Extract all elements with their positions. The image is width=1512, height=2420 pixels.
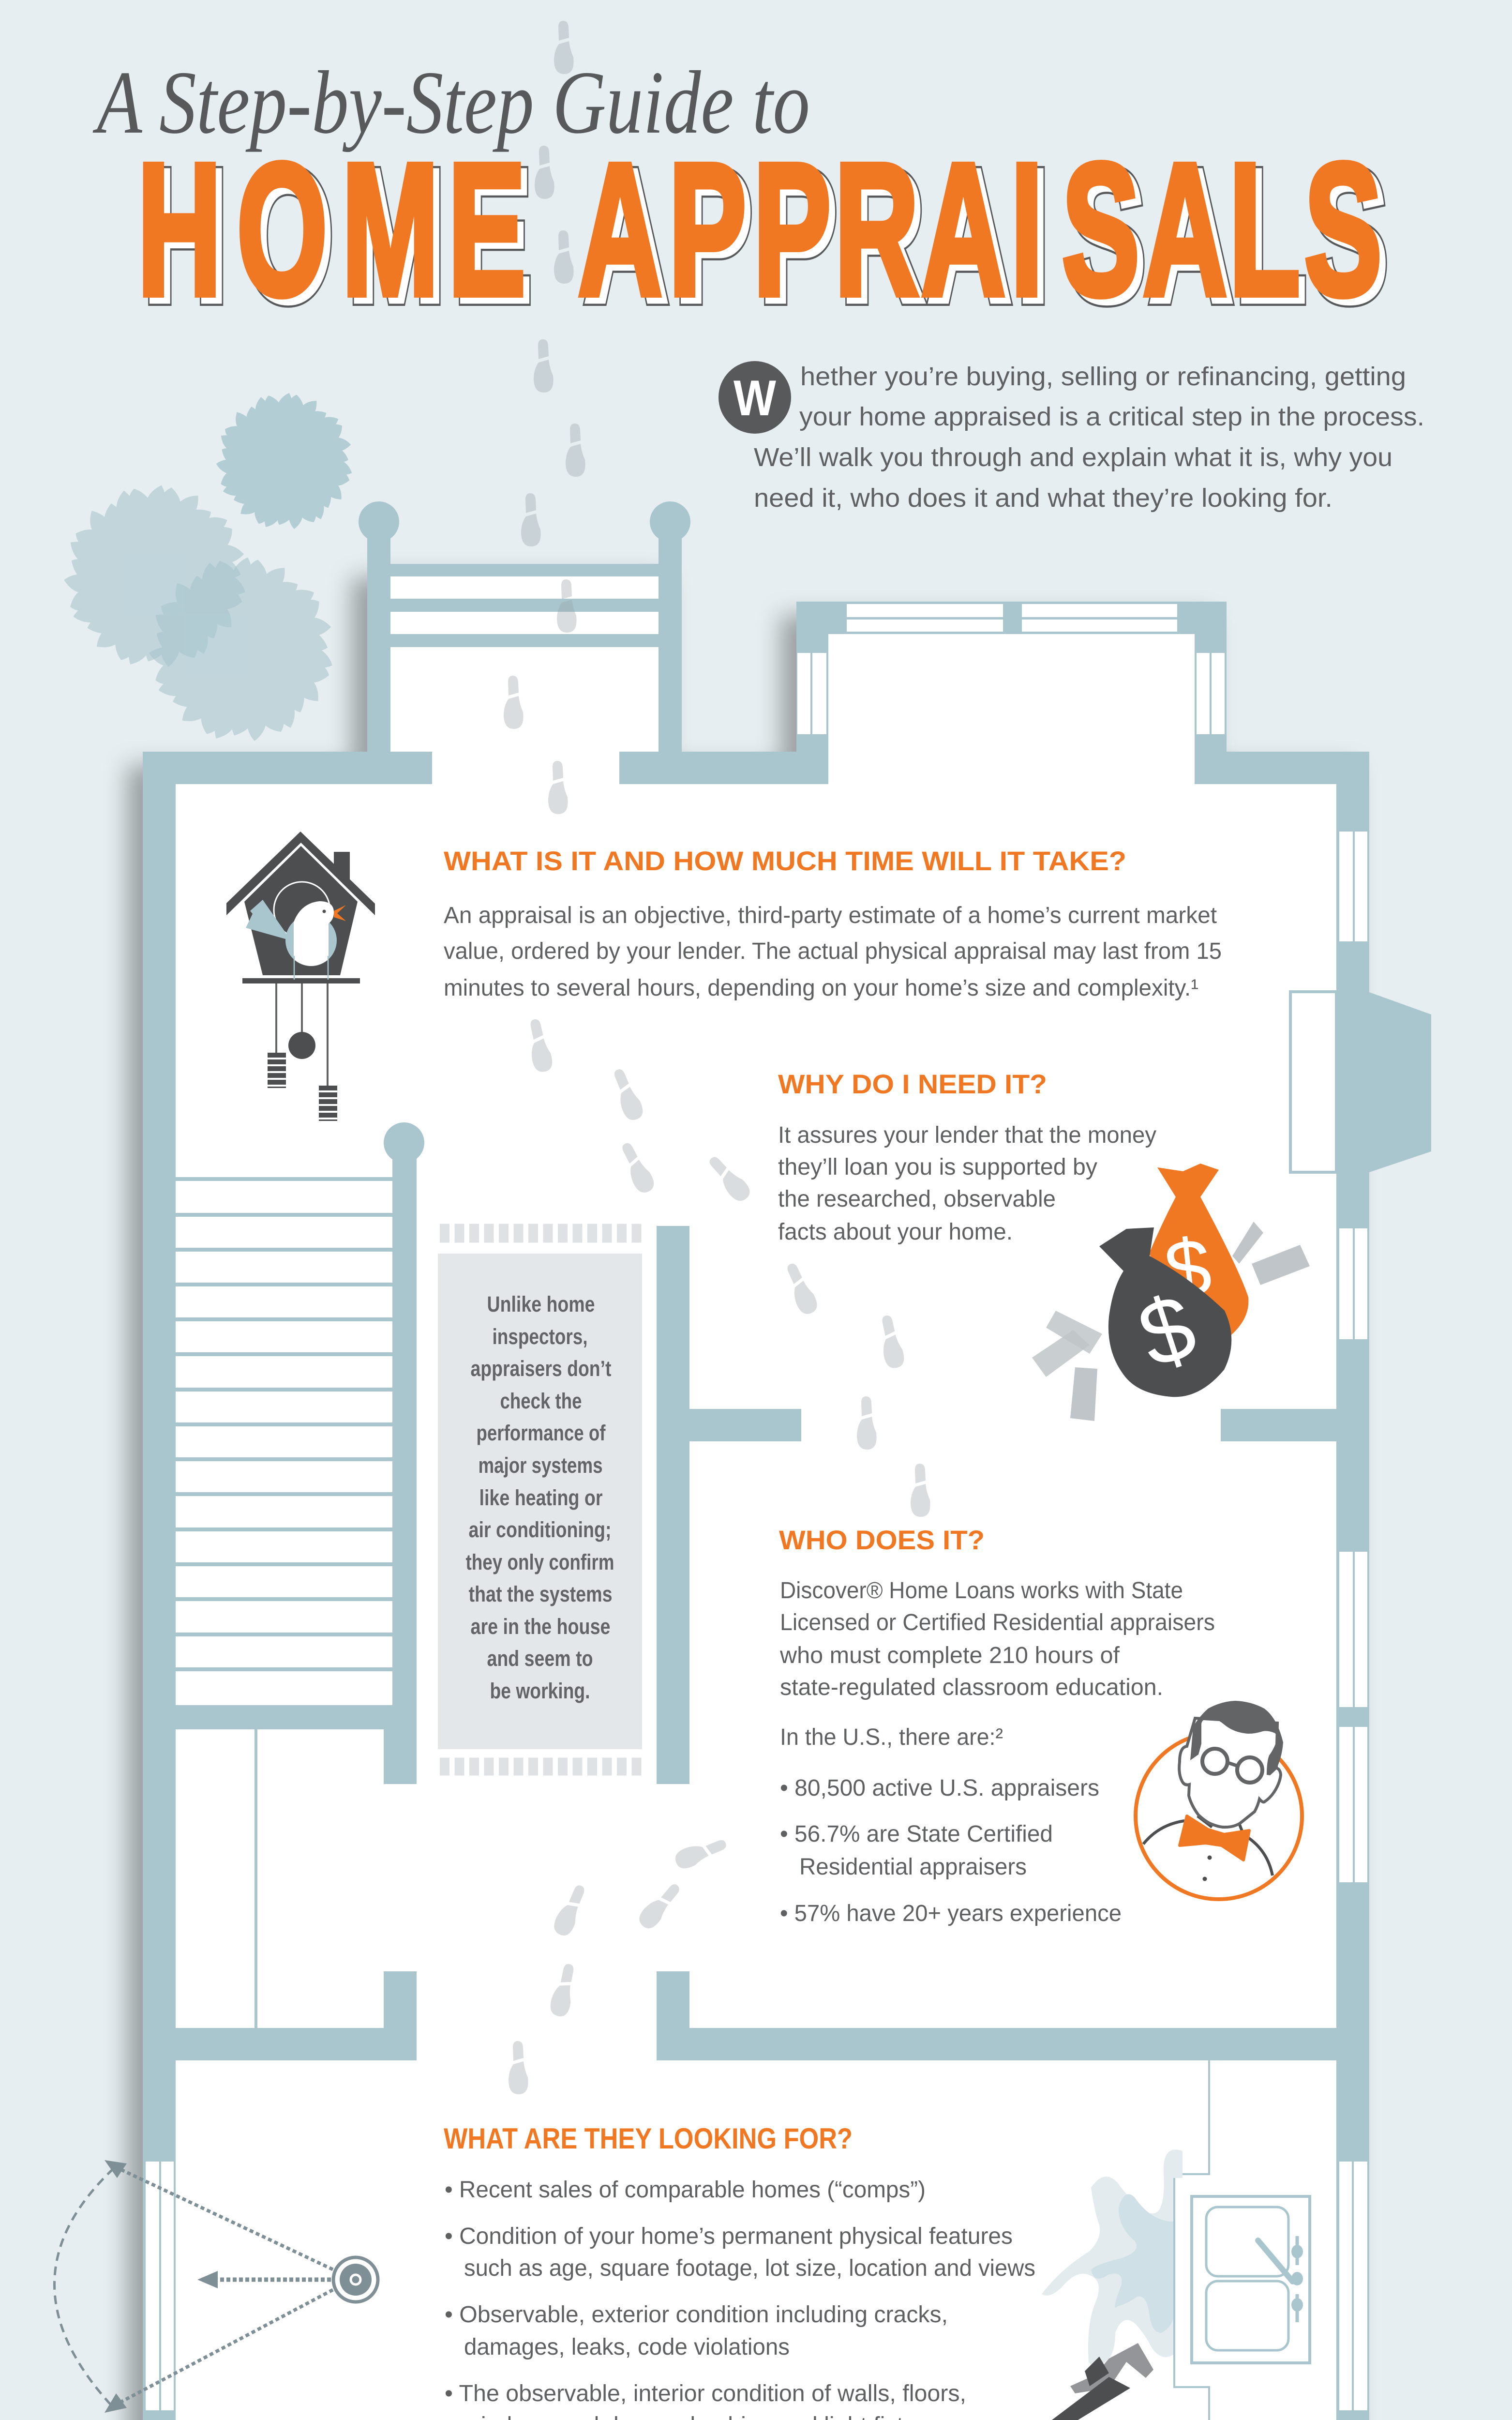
rug note: Unlike home (487, 1292, 595, 1316)
icon: appraiser portrait (1136, 1701, 1302, 1899)
rug note: they only confirm (465, 1550, 614, 1574)
house drop shadow (127, 577, 1354, 2420)
staircase (176, 1122, 424, 1784)
panel: who does it: Licensed or Certified Residential appraisers (780, 1610, 1215, 1635)
panel: what are they looking for: • Observable, exterior condition including cracks, (445, 2302, 948, 2328)
panel: who does it: Discover® Home Loans works with State (780, 1578, 1183, 1603)
rug note (438, 1233, 642, 1767)
rug note: are in the house (470, 1614, 611, 1639)
panel: who does it: In the U.S., there are:² (780, 1724, 1003, 1750)
icon: pipe wrench (1020, 2343, 1153, 2420)
rug note: be working. (490, 1679, 590, 1703)
title: home appraisals: HOME APPRAISALS (144, 131, 1388, 341)
panel: what are they looking for: WHAT ARE THEY LOOKING FOR? (444, 2122, 853, 2155)
drop cap W: W (734, 370, 777, 426)
house floor plan (143, 501, 1431, 2420)
rug note: and seem to (487, 1646, 593, 1671)
panel: what is it (444, 846, 1222, 1001)
title: a step-by-step guide to: A Step-by-Step Guide to (92, 53, 810, 152)
panel: who does it: state-regulated classroom education. (780, 1675, 1163, 1700)
panel: what is it: WHAT IS IT AND HOW MUCH TIME WILL IT TAKE? (444, 846, 1126, 876)
panel: what are they looking for: damages, leaks, code violations (464, 2334, 790, 2360)
panel: why do I need it: facts about your home. (778, 1219, 1013, 1245)
panel: why do I need it: It assures your lender that the money (778, 1122, 1156, 1148)
bay window room (796, 602, 1227, 789)
rug note: like heating or (479, 1485, 603, 1510)
rug note: air conditioning; (468, 1517, 612, 1542)
intro text: need it, who does it and what they’re looking for. (754, 484, 1332, 513)
icon: money bags (1032, 1164, 1310, 1421)
panel: what is it: An appraisal is an objective, third-party estimate of a home’s current market (444, 903, 1217, 928)
rug note: inspectors, (493, 1324, 587, 1349)
icon: appraiser viewpoint (54, 2160, 378, 2413)
panel: who does it (779, 1525, 1215, 1926)
panel: who does it: • 80,500 active U.S. appraisers (780, 1775, 1099, 1801)
drop cap W (719, 361, 791, 434)
panel: why do I need it: the researched, observable (778, 1186, 1056, 1212)
side windows (146, 832, 1367, 2420)
panel: what is it: minutes to several hours, depending on your home’s size and complexity.¹ (444, 975, 1198, 1001)
icon: money bags: $ (1127, 1274, 1207, 1388)
fireplace bump upper (1290, 992, 1431, 1172)
panel: what is it: value, ordered by your lender. The actual physical appraisal may last from 15 (444, 938, 1222, 964)
panel: why do I need it (778, 1069, 1156, 1245)
bush: top left (63, 485, 247, 668)
panel: who does it: • 56.7% are State Certified (780, 1821, 1053, 1847)
panel: who does it: • 57% have 20+ years experience (780, 1901, 1122, 1926)
panel: what are they looking for: such as age, square footage, lot size, location and views (464, 2255, 1035, 2281)
icon: faucet (1250, 2236, 1303, 2322)
bush: top centre (149, 557, 334, 742)
intro text: hether you’re buying, selling or refinancing, getting (800, 362, 1406, 391)
panel: what are they looking for: • Recent sales of comparable homes (“comps”) (445, 2177, 926, 2203)
panel: who does it: Residential appraisers (799, 1854, 1027, 1880)
top porch (359, 501, 690, 757)
rug note: appraisers don’t (470, 1356, 612, 1381)
panel: why do I need it: WHY DO I NEED IT? (778, 1069, 1047, 1099)
interior walls (176, 1226, 1336, 2420)
title: home appraisals: HOME APPRAISALS (137, 125, 1382, 334)
panel: who does it: who must complete 210 hours of (779, 1643, 1120, 1668)
intro text: your home appraised is a critical step in the process. (799, 402, 1424, 431)
intro text (719, 361, 1424, 513)
icon: money bags: $ (1160, 1221, 1215, 1317)
outer walls (143, 752, 1369, 2420)
footprints trail (241, 21, 930, 2420)
intro text: We’ll walk you through and explain what it is, why you (754, 443, 1392, 472)
kitchen counter and sink (1174, 2060, 1310, 2420)
bush: top right (216, 393, 353, 529)
panel: why do I need it: they’ll loan you is supported by (778, 1154, 1097, 1180)
panel: what are they looking for: • The observable, interior condition of walls, floors, (445, 2381, 966, 2406)
rug note: major systems (478, 1453, 603, 1478)
water splash (1042, 2149, 1183, 2366)
rug note: that the systems (468, 1582, 613, 1606)
title: home appraisals: HOME APPRAISALS (144, 131, 1388, 341)
panel: who does it: WHO DOES IT? (779, 1525, 985, 1555)
icon: cuckoo clock (226, 832, 375, 1121)
panel: what are they looking for (444, 2122, 1035, 2420)
rug note: check the (500, 1389, 582, 1413)
panel: what are they looking for: • Condition of your home’s permanent physical features (445, 2223, 1013, 2249)
rug note: performance of (476, 1421, 606, 1445)
